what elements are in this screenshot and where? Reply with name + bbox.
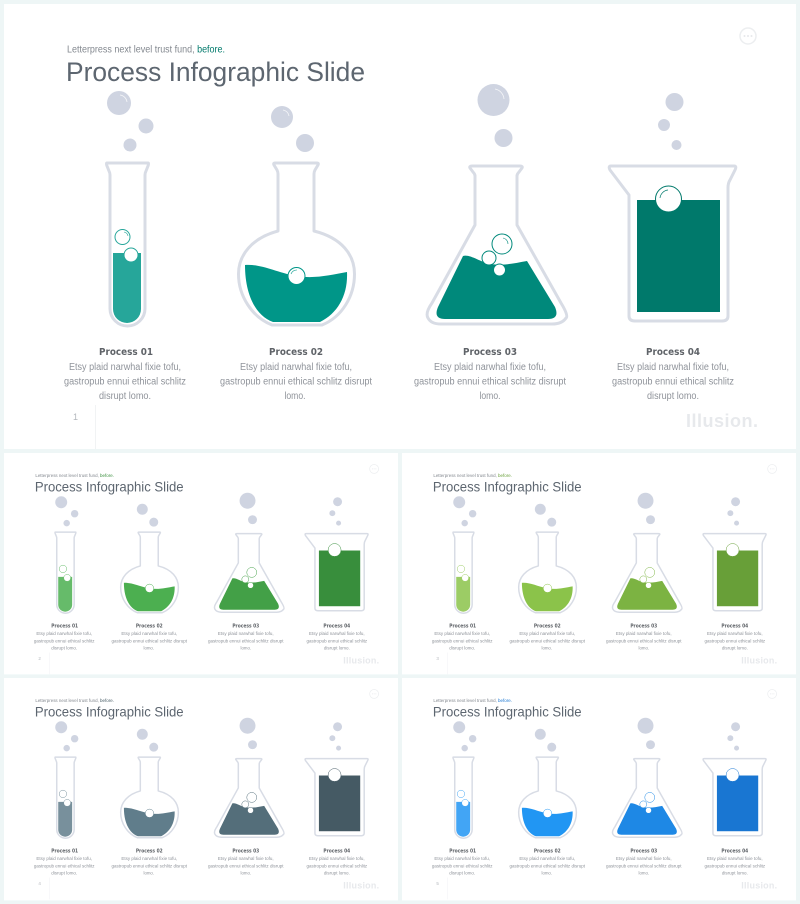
page number: 5 xyxy=(436,881,439,886)
panel: slide green xyxy=(4,453,398,674)
icon: menu dots xyxy=(740,28,756,44)
text: process 03: lomo. xyxy=(241,871,251,877)
icon: conical flask xyxy=(612,493,682,612)
text: process 02: Process 02 xyxy=(269,347,323,358)
text: process 01: disrupt lomo. xyxy=(51,646,77,652)
text: process 03 xyxy=(208,849,284,877)
text: process 04: Etsy plaid narwhal fixie tofu, xyxy=(707,856,763,862)
brand: Illusion. xyxy=(741,655,777,665)
icon: beaker xyxy=(305,497,368,611)
text: process 02: Etsy plaid narwhal fixie tofu, xyxy=(121,631,177,637)
icon: conical flask xyxy=(612,718,682,837)
text: process 04 xyxy=(306,624,368,652)
icon: beaker xyxy=(609,93,736,321)
icon: menu dots xyxy=(370,689,379,698)
icon: test tube xyxy=(453,721,476,838)
text: process 04: disrupt lomo. xyxy=(722,871,748,877)
text: process 04: Process 04 xyxy=(721,849,749,855)
text: process 01: gastropub ennui ethical schlitz xyxy=(64,376,186,388)
panel: slide blue xyxy=(402,678,796,900)
text: process 04: gastropub ennui ethical schlitz xyxy=(704,638,766,644)
icon: beaker xyxy=(703,722,766,836)
icon: beaker xyxy=(305,722,368,836)
title: Process Infographic Slide xyxy=(66,57,365,87)
text: process 02: Process 02 xyxy=(534,624,561,630)
icon: round flask xyxy=(519,729,576,838)
title: Process Infographic Slide xyxy=(35,704,184,719)
text: process 02: gastropub ennui ethical schlitz disrupt xyxy=(509,863,586,869)
text: process 02 xyxy=(509,624,586,652)
text: process 01: Etsy plaid narwhal fixie tofu, xyxy=(69,362,181,373)
text: process 04: gastropub ennui ethical schlitz xyxy=(306,638,368,644)
page number: 3 xyxy=(436,656,439,661)
text: process 03: gastropub ennui ethical schlitz disrupt xyxy=(606,638,682,644)
text: process 02: gastropub ennui ethical schlitz disrupt xyxy=(111,638,188,644)
text: process 02: lomo. xyxy=(542,646,552,652)
icon: test tube xyxy=(55,496,78,613)
title: Process Infographic Slide xyxy=(433,704,582,719)
text: process 01: disrupt lomo. xyxy=(99,391,151,402)
text: process 04: gastropub ennui ethical schlitz xyxy=(704,863,766,869)
icon: menu dots xyxy=(370,464,379,473)
icon: round flask xyxy=(238,106,354,325)
text: process 02: gastropub ennui ethical schlitz disrupt xyxy=(509,638,586,644)
icon: round flask xyxy=(519,504,576,613)
text: process 03: gastropub ennui ethical schlitz disrupt xyxy=(208,863,284,869)
text: process 02: Etsy plaid narwhal fixie tofu, xyxy=(121,856,177,862)
text: process 02: lomo. xyxy=(144,871,154,877)
text: process 03: lomo. xyxy=(480,391,500,402)
text: process 02: gastropub ennui ethical schlitz disrupt xyxy=(220,376,372,388)
text: process 01: disrupt lomo. xyxy=(51,871,77,877)
text: process 03: gastropub ennui ethical schlitz disrupt xyxy=(606,863,682,869)
text: process 03: gastropub ennui ethical schlitz disrupt xyxy=(414,376,566,388)
text: process 03 xyxy=(414,347,566,402)
text: process 04: Process 04 xyxy=(646,347,700,358)
text: process 01: disrupt lomo. xyxy=(449,871,475,877)
text: process 02 xyxy=(220,347,372,402)
text: process 03: Etsy plaid narwhal fixie tofu, xyxy=(616,856,672,862)
text: process 01: Process 01 xyxy=(99,347,153,358)
title: Process Infographic Slide xyxy=(433,479,582,494)
brand: Illusion. xyxy=(686,411,758,431)
text: process 03: Process 03 xyxy=(463,347,517,358)
text: process 01: Process 01 xyxy=(449,849,477,855)
text: process 04: Process 04 xyxy=(323,624,351,630)
text: process 04: Etsy plaid narwhal fixie tofu, xyxy=(309,856,365,862)
text: process 04: Etsy plaid narwhal fixie tofu, xyxy=(617,362,729,373)
icon: test tube xyxy=(55,721,78,838)
text: process 03: Process 03 xyxy=(232,624,260,630)
text: process 04 xyxy=(704,849,766,877)
text: process 03: gastropub ennui ethical schlitz disrupt xyxy=(208,638,284,644)
text: process 02: lomo. xyxy=(542,871,552,877)
text: process 04: Etsy plaid narwhal fixie tofu, xyxy=(707,631,763,637)
text: process 03 xyxy=(606,624,682,652)
text: process 03: Etsy plaid narwhal fixie tofu, xyxy=(218,631,274,637)
text: process 04: gastropub ennui ethical schlitz xyxy=(306,863,368,869)
icon: conical flask xyxy=(214,718,284,837)
text: process 01: Process 01 xyxy=(51,624,79,630)
text: process 03: Process 03 xyxy=(630,849,658,855)
text: process 02: gastropub ennui ethical schlitz disrupt xyxy=(111,863,188,869)
subtitle: Letterpress next level trust fund, before. xyxy=(433,473,512,479)
text: process 02: Etsy plaid narwhal fixie tofu, xyxy=(519,856,575,862)
text: process 01: Etsy plaid narwhal fixie tofu, xyxy=(434,631,490,637)
text: process 03: lomo. xyxy=(639,871,649,877)
text: process 04: gastropub ennui ethical schlitz xyxy=(612,376,734,388)
icon: round flask xyxy=(121,729,178,838)
text: process 04: disrupt lomo. xyxy=(324,871,350,877)
text: process 03: lomo. xyxy=(241,646,251,652)
text: process 01 xyxy=(34,624,95,652)
text: process 03 xyxy=(208,624,284,652)
icon: conical flask xyxy=(214,493,284,612)
text: process 04 xyxy=(306,849,368,877)
text: process 02: Etsy plaid narwhal fixie tofu, xyxy=(519,631,575,637)
text: process 03: Process 03 xyxy=(232,849,260,855)
text: process 03: Process 03 xyxy=(630,624,658,630)
page number: 4 xyxy=(38,881,41,886)
icon: menu dots xyxy=(768,689,777,698)
panel: slide blue grey xyxy=(4,678,398,900)
text: process 01: Etsy plaid narwhal fixie tofu, xyxy=(36,856,92,862)
text: process 01: Process 01 xyxy=(449,624,477,630)
text: process 03 xyxy=(606,849,682,877)
text: process 04: Process 04 xyxy=(721,624,749,630)
text: process 04: Etsy plaid narwhal fixie tofu, xyxy=(309,631,365,637)
icon: menu dots xyxy=(768,464,777,473)
text: process 02: Process 02 xyxy=(534,849,561,855)
text: process 04: disrupt lomo. xyxy=(722,646,748,652)
panel: slide light green xyxy=(402,453,796,674)
icon: conical flask xyxy=(427,84,567,324)
text: process 02 xyxy=(509,849,586,877)
icon: beaker xyxy=(703,497,766,611)
brand: Illusion. xyxy=(343,880,379,890)
title: Process Infographic Slide xyxy=(35,479,184,494)
brand: Illusion. xyxy=(343,655,379,665)
text: process 01: Process 01 xyxy=(51,849,79,855)
text: process 01 xyxy=(34,849,95,877)
brand: Illusion. xyxy=(741,880,777,890)
text: process 04: disrupt lomo. xyxy=(324,646,350,652)
text: process 01: gastropub ennui ethical schlitz xyxy=(34,638,95,644)
text: process 01: Etsy plaid narwhal fixie tofu, xyxy=(36,631,92,637)
text: process 03: Etsy plaid narwhal fixie tofu, xyxy=(434,362,546,373)
subtitle: Letterpress next level trust fund, before. xyxy=(35,698,114,704)
icon: test tube xyxy=(106,91,154,326)
text: process 02 xyxy=(111,849,188,877)
page number: 1 xyxy=(73,412,78,422)
panel: main slide teal xyxy=(4,4,796,449)
text: process 04 xyxy=(704,624,766,652)
text: process 01: gastropub ennui ethical schlitz xyxy=(432,863,493,869)
text: process 01: gastropub ennui ethical schlitz xyxy=(432,638,493,644)
text: process 02: lomo. xyxy=(284,391,306,402)
subtitle: Letterpress next level trust fund, before. xyxy=(35,473,114,479)
text: process 02: Etsy plaid narwhal fixie tofu, xyxy=(240,362,352,373)
text: process 04: disrupt lomo. xyxy=(647,391,699,402)
text: process 04 xyxy=(612,347,734,402)
text: process 02: lomo. xyxy=(144,646,154,652)
text: process 02: Process 02 xyxy=(136,849,163,855)
text: process 01: gastropub ennui ethical schlitz xyxy=(34,863,95,869)
text: process 01: Etsy plaid narwhal fixie tofu, xyxy=(434,856,490,862)
text: process 01: disrupt lomo. xyxy=(449,646,475,652)
page number: 2 xyxy=(38,656,41,661)
text: process 02: Process 02 xyxy=(136,624,163,630)
text: process 02 xyxy=(111,624,188,652)
text: process 04: Process 04 xyxy=(323,849,351,855)
subtitle: Letterpress next level trust fund, before. xyxy=(433,698,512,704)
text: process 01 xyxy=(64,347,186,402)
text: process 03: Etsy plaid narwhal fixie tofu, xyxy=(616,631,672,637)
text: process 03: Etsy plaid narwhal fixie tofu, xyxy=(218,856,274,862)
text: process 01 xyxy=(432,624,493,652)
subtitle: Letterpress next level trust fund, before. xyxy=(67,44,225,56)
icon: test tube xyxy=(453,496,476,613)
text: process 01 xyxy=(432,849,493,877)
icon: round flask xyxy=(121,504,178,613)
text: process 03: lomo. xyxy=(639,646,649,652)
